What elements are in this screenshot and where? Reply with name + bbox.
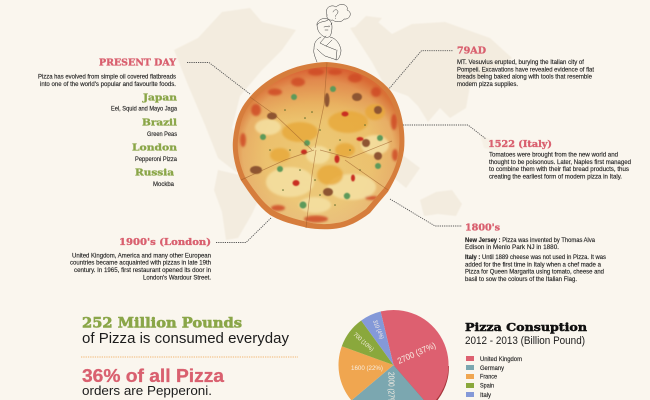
- pie chart: [338, 310, 449, 400]
- pie labels: [351, 320, 437, 400]
- slice: Spain: [342, 320, 394, 365]
- topping: Brazil: Green Peas: [147, 131, 178, 138]
- heading: present day: PRESENT DAY: [99, 58, 176, 68]
- intro text: into one of the world's popular and favourite foods.: [40, 81, 176, 88]
- body: 1522: to combine them with their flat bread products, thus: [489, 166, 630, 173]
- heading: Brazil: Brazil: [142, 118, 177, 128]
- stat: 252 million pounds: [82, 316, 289, 347]
- heading: London: London: [132, 142, 177, 154]
- chart legend: [466, 356, 522, 399]
- chart subtitle: 2012 - 2013 (Billion Pound): [465, 335, 585, 347]
- connector: 1800's: [390, 199, 462, 226]
- intro text: [38, 74, 177, 88]
- stat: 36% pepperoni: [82, 366, 225, 398]
- body: 1522: thought to be poisonous. Later, Naples first managed: [489, 159, 631, 166]
- heading: 79AD: 79AD: [457, 46, 486, 56]
- stat caption: of Pizza is consumed everyday: [82, 330, 289, 347]
- world map background: [174, 8, 512, 240]
- topping: London: Pepperoni Pizza: [135, 156, 177, 163]
- body: 1800's: Pizza for Queen Margarita using tomato, cheese and: [465, 268, 604, 276]
- body: 1800's: [465, 237, 607, 283]
- chart legend: Italy: [480, 392, 492, 399]
- icon: thinking man sketch: [314, 4, 350, 62]
- intro text: Pizza has evolved from simple oil covered flatbreads: [38, 74, 177, 80]
- body: 79AD: breads being baked along with tools that resemble: [457, 74, 592, 80]
- heading: Japan: Japan: [142, 92, 177, 104]
- connector: present day: [187, 62, 250, 94]
- body: 1800's: added for the first time in Italy when a chef made a: [465, 261, 601, 268]
- sauce shading: [238, 67, 400, 224]
- slice: Italy: [361, 312, 394, 365]
- slice cuts: [241, 63, 392, 228]
- herbs: [269, 109, 366, 206]
- topping: Japan: Eel, Squid and Mayo Jaga: [111, 106, 177, 112]
- pie labels: 1600 (22%): [351, 365, 383, 372]
- connector: 79AD: [388, 51, 453, 90]
- cheese: [238, 67, 400, 224]
- topping: Russia: Mockba: [153, 181, 174, 188]
- body: 79AD: [457, 59, 594, 88]
- pie edge shadow: [394, 366, 449, 400]
- body: 79AD: modern pizza supplies.: [457, 81, 518, 88]
- stat heading: 36% of all Pizza: [82, 366, 225, 386]
- body: 1900's: London's Wardour Street.: [143, 274, 211, 281]
- text block: 79AD: [457, 46, 594, 88]
- pie labels: 310 (4%): [371, 320, 384, 340]
- chart legend: Germany: [480, 365, 505, 372]
- slice: France: [338, 346, 394, 400]
- pie labels: 700 (10%): [352, 332, 374, 353]
- stat caption: orders are Pepperoni.: [82, 384, 212, 398]
- heading: 1900's: 1900's (London): [119, 237, 211, 248]
- body: 1800's: New Jersey : Pizza was invented by Thomas Alva: [465, 237, 595, 244]
- body: 1900's: century. In 1965, first restaurant opened its door in: [74, 267, 211, 274]
- heading: 1800's: 1800's: [465, 222, 500, 234]
- cheese and sauce mottling: [240, 68, 398, 222]
- stat heading: 252 Million Pounds: [82, 316, 242, 332]
- text block: present day: [38, 58, 178, 188]
- heading: 1522: 1522 (Italy): [488, 139, 552, 150]
- chart heading: Pizza Consuption: [465, 320, 588, 334]
- chart legend: United Kingdom: [480, 356, 522, 363]
- slice: Germany: [351, 365, 430, 400]
- body: 1522: Tomatoes were brought from the new world and: [489, 152, 618, 158]
- body: 1900's: countries became acquainted with pizzas in late 19th: [70, 260, 211, 266]
- connector: 1900's: [216, 218, 271, 242]
- slice: United Kingdom: [381, 310, 449, 400]
- crust: [233, 62, 404, 229]
- text block: 1900's London: [70, 237, 211, 281]
- chart legend: France: [480, 374, 497, 380]
- body: 1800's: Edison in Menlo Park NJ in 1880.: [465, 244, 559, 251]
- text block: 1800's: [465, 222, 607, 283]
- body: 1522: creating the earliest form of modern pizza in Italy.: [489, 174, 622, 180]
- chart title: [465, 320, 588, 347]
- pie labels: 2700 (37%): [396, 340, 437, 366]
- body: 79AD: Pompeii. Excavations have revealed evidence of flat: [457, 66, 594, 73]
- body: 1522: [489, 152, 631, 180]
- pizza photo: [233, 62, 404, 229]
- text block: 1522: [488, 139, 631, 180]
- chart legend: Spain: [480, 382, 494, 390]
- body: 79AD: MT. Vesuvius erupted, burying the Italian city of: [457, 59, 584, 66]
- connector: 1522: [403, 125, 486, 139]
- heading: Russia: Russia: [135, 168, 174, 178]
- body: 1900's: [70, 252, 211, 281]
- body: 1800's: Italy : Until 1889 cheese was not used in Pizza. It was: [465, 254, 607, 261]
- body: 1800's: basil to sow the colours of the Italian Flag.: [465, 276, 577, 283]
- body: 1900's: United Kingdom, America and many other European: [72, 252, 211, 259]
